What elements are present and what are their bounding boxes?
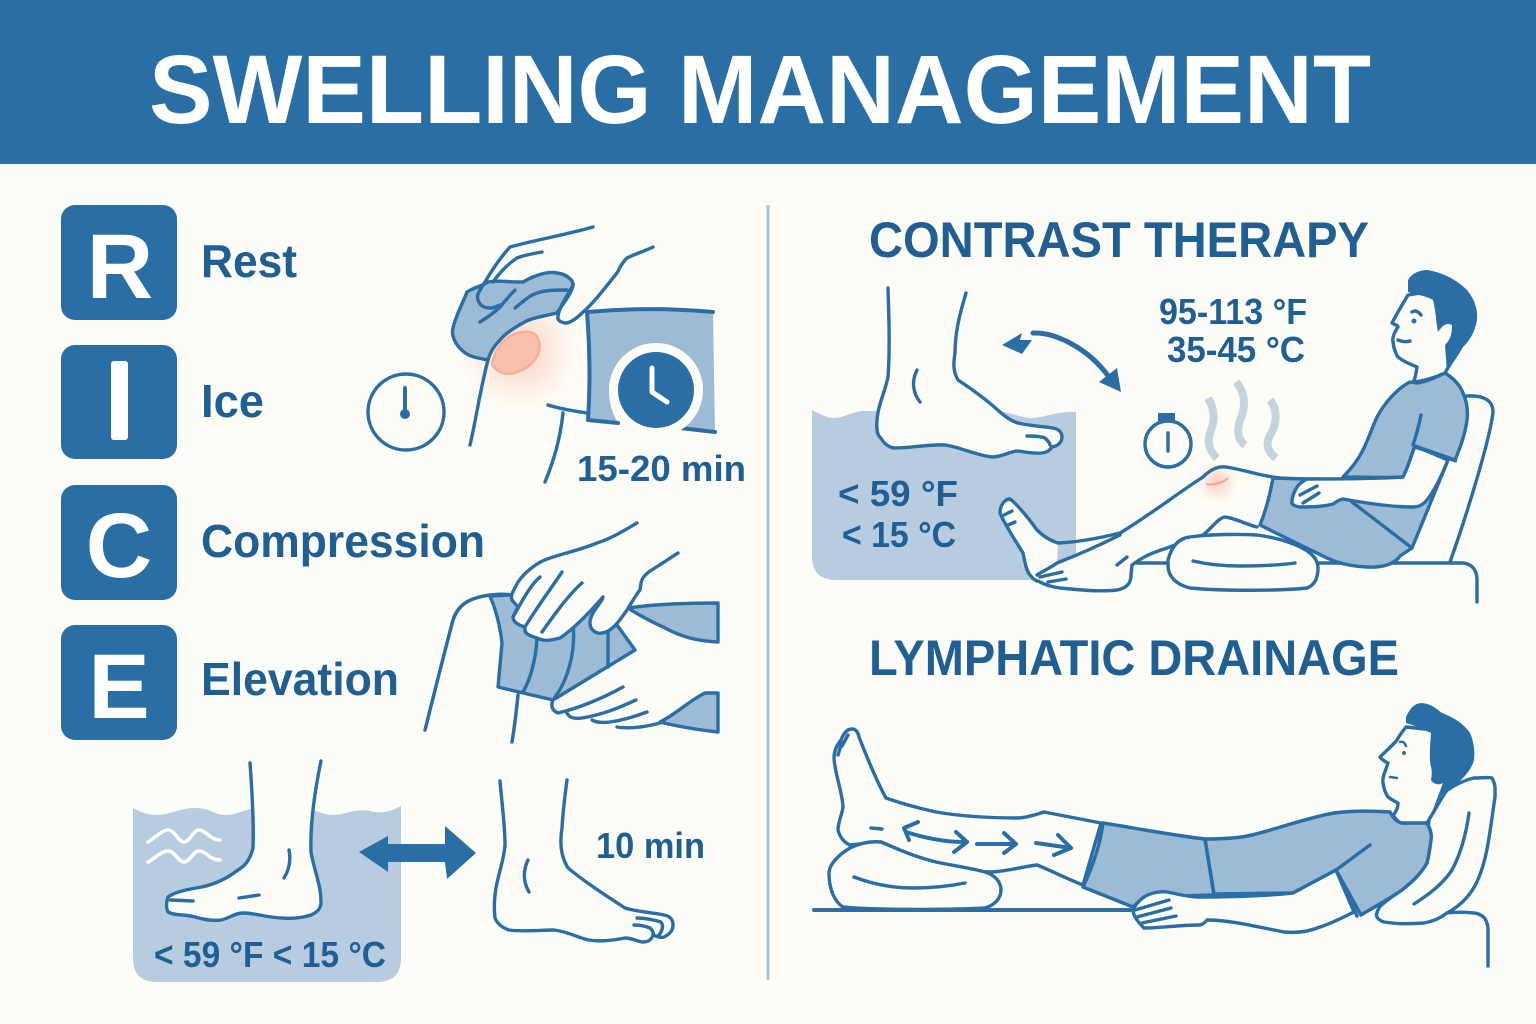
title: SWELLING MANAGEMENT: [149, 35, 1371, 144]
pillow: [829, 842, 1001, 909]
icon: stopwatch: [1145, 413, 1191, 467]
arrow: double headed: [359, 826, 476, 879]
I tile: [61, 345, 177, 459]
arrow: curved double: [1002, 333, 1121, 392]
pillow: [1168, 534, 1318, 590]
panel: RICE list: [61, 205, 485, 740]
label: Elevation: Elevation: [201, 653, 399, 705]
backrest: [1376, 778, 1495, 924]
C tile: C: [86, 495, 152, 597]
heading: contrast therapy: CONTRAST THERAPY: [869, 212, 1369, 268]
label: warm temperature: 95-113 °F: [1159, 291, 1307, 332]
label: warm temperature: 35-45 °C: [1167, 329, 1305, 370]
label: water temperature: < 59 °F < 15 °C: [154, 934, 386, 975]
arrows: [904, 822, 1071, 855]
shorts: [1083, 823, 1214, 907]
shirt: [1343, 373, 1467, 477]
E tile: E: [88, 636, 150, 738]
icon: large clock: [609, 343, 703, 437]
foot and leg: [834, 729, 1101, 885]
label: Compression: Compression: [201, 515, 485, 567]
R tile: [61, 205, 177, 320]
heading: lymphatic drainage: LYMPHATIC DRAINAGE: [869, 630, 1399, 686]
E tile: [61, 625, 177, 740]
head: [1380, 727, 1447, 823]
shirt: [1205, 811, 1431, 915]
head: [1392, 290, 1463, 382]
label: 15-20 min: 15-20 min: [577, 448, 746, 489]
illustration: reclining person: [814, 703, 1495, 966]
label: Ice: Ice: [201, 375, 264, 427]
shorts and hip: [1260, 460, 1448, 567]
label: cold temperature: < 59 °F: [838, 473, 958, 514]
hair: [1408, 270, 1477, 372]
header banner: [0, 0, 1536, 164]
illustration: foot out of water: [494, 780, 673, 942]
icon: steam: [1208, 382, 1276, 458]
label: warm temperature: [1159, 291, 1307, 370]
illustration: foot in cold water: < 15 °C: [842, 514, 956, 555]
illustration: compression bandage: [425, 523, 718, 742]
label: Rest: Rest: [201, 235, 297, 287]
C tile: [61, 485, 177, 600]
waves: [148, 830, 220, 862]
R tile: R: [87, 216, 153, 318]
illustration: cold water bath: [133, 761, 401, 982]
arm: [1292, 446, 1448, 507]
illustration: seated person: [1000, 270, 1493, 602]
hair: [1406, 703, 1474, 820]
illustration: ice pack on knee: [452, 227, 715, 482]
label: 10 min: 10 min: [596, 825, 705, 866]
illustration: foot in cold water: [812, 288, 1076, 580]
arm: [1133, 870, 1354, 932]
icon: small clock: [368, 374, 444, 450]
